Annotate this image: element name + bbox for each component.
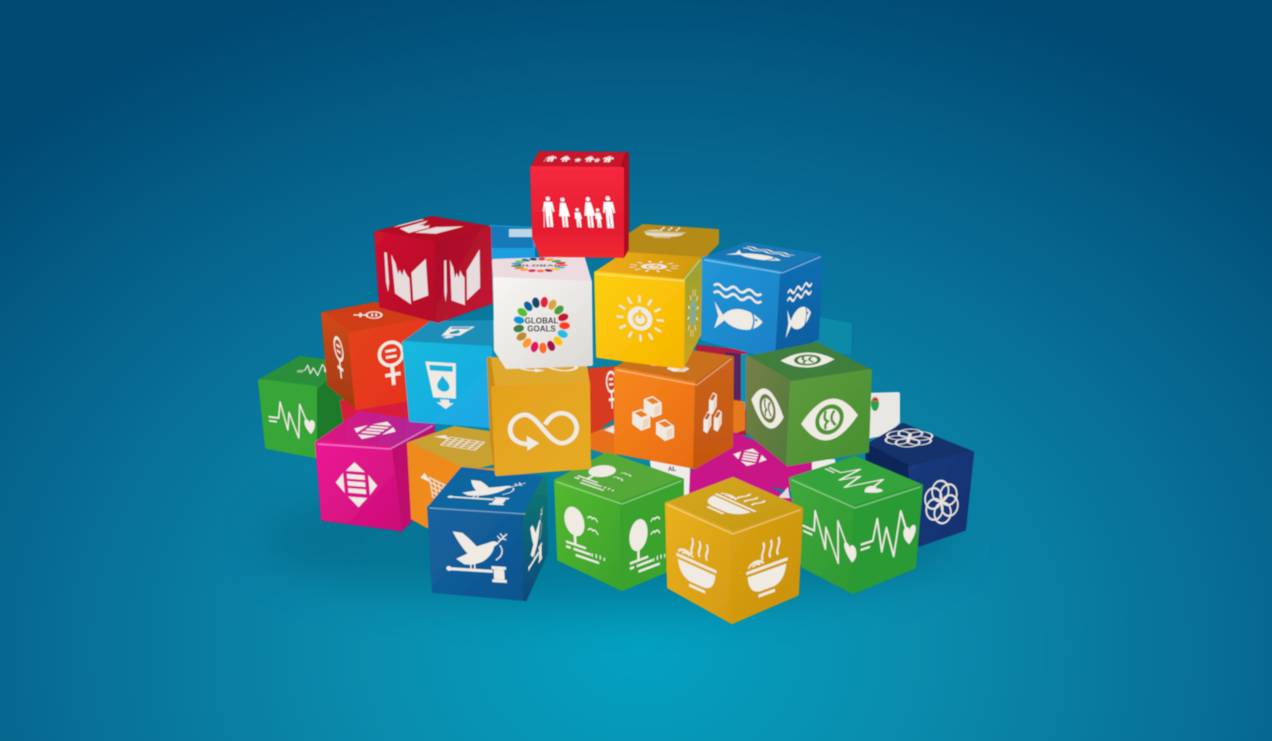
icon: fish right (785, 281, 813, 339)
icon: infinity front (510, 413, 578, 451)
cube: red back right (583, 368, 617, 455)
cube: blue peace and justice (429, 469, 546, 599)
icon: water glass top (434, 327, 475, 338)
cube: yellow clean energy (596, 254, 702, 367)
icon: eye left (751, 380, 784, 436)
cube: green good health (791, 458, 921, 592)
cube: bright red no poverty (532, 153, 627, 256)
icon: book top (385, 219, 464, 236)
icon: fish top (724, 246, 797, 263)
icon: sun right (688, 283, 698, 343)
icon: fish top (509, 229, 533, 237)
cube: cyan clean water (404, 322, 496, 426)
icon: tree top (570, 463, 640, 492)
icon: reduced inequalities top (341, 420, 408, 441)
icon: family top (543, 155, 615, 162)
icon: cubes right (703, 386, 722, 442)
icon: gender left (333, 335, 346, 381)
icon: tree right (629, 510, 665, 575)
icon: infinity top (519, 363, 578, 372)
cube fragment: white with label: AL (668, 467, 676, 473)
cube: gold zero hunger (667, 479, 801, 622)
label: wheel top text: GLOBAL (518, 264, 561, 267)
icon: pulse top (812, 462, 898, 497)
icon: fish left (713, 283, 763, 337)
icon: flower top (884, 428, 934, 448)
icon: eye top (780, 352, 834, 368)
cube: magenta reduced inequalities (317, 413, 433, 530)
icon: book right (444, 249, 480, 311)
logo: global goals wheel (513, 296, 570, 354)
icon: cubes top (641, 354, 700, 373)
icon: gender top (354, 312, 382, 318)
cube: blue back (490, 226, 533, 290)
cube pile (260, 153, 972, 622)
icon: eye right (800, 394, 859, 445)
icon: family front (541, 195, 617, 228)
icon: water glass front (425, 362, 460, 410)
cube: green life on land (556, 454, 682, 589)
cube fragments: back middle (698, 347, 748, 434)
icon: reduced inequalities left (334, 460, 379, 509)
icon: pulse right (860, 506, 916, 567)
cube: gold responsible consumption (489, 359, 589, 474)
cube: green climate action eye (748, 344, 870, 464)
icon: bowl top (694, 487, 774, 520)
icon: dove left (444, 530, 510, 583)
icon: pulse left (800, 504, 859, 572)
cube: blue life below water (703, 244, 821, 358)
label: global goals: GLOBAL (525, 316, 558, 326)
icon: city left (419, 470, 456, 508)
icon: book left (384, 251, 429, 308)
icon: bowl right (746, 534, 788, 602)
icon: sun top (622, 259, 686, 274)
icon: bowl top (641, 227, 689, 238)
cube fragment: magenta back (687, 434, 812, 520)
cube: orange industry (616, 346, 732, 467)
cube: small white, behind eye cube (862, 394, 898, 438)
cube: crimson quality education (376, 218, 491, 321)
icon: bowl left (676, 531, 717, 599)
icon: pulse left (267, 400, 317, 440)
icon: sun front (616, 293, 664, 344)
label: global goals: GOALS (527, 324, 556, 334)
cube: green small left (260, 358, 345, 456)
icon: reduced inequalities top (730, 446, 770, 469)
cube fragment: white with label (652, 459, 836, 495)
ground shadow under pile (260, 475, 960, 605)
cube: red-orange gender equality (323, 304, 427, 408)
cube fragment: crimson (342, 402, 407, 425)
icon: pulse top (297, 364, 332, 377)
icon: tree left (564, 504, 604, 565)
icon: flower right (924, 477, 959, 527)
icon: gender right (378, 341, 405, 387)
icon: city top (427, 434, 486, 450)
icon: dove top (443, 479, 526, 506)
cube: navy flower (867, 425, 972, 545)
icon: gender back (606, 372, 617, 409)
cube: dark gold back (625, 226, 717, 257)
cube: orange sustainable cities (409, 428, 496, 526)
cube: teal, far back (795, 319, 850, 352)
icon: dove right (528, 507, 543, 581)
cube: white global goals (494, 258, 591, 367)
icon: cubes left (632, 392, 674, 443)
